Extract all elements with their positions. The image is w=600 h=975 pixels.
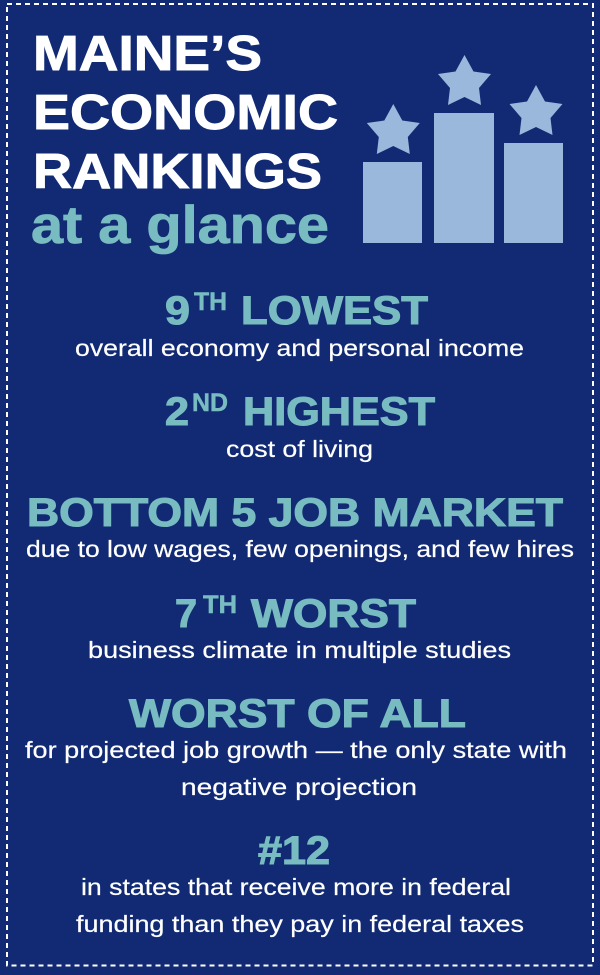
stat: 9th lowest: 9 (165, 289, 190, 333)
stat: bottom 5 job market: due to low wages, few openings, and few hires (26, 536, 574, 562)
stat: 9th lowest: LOWEST (241, 289, 428, 333)
stat: 2nd highest (165, 389, 435, 462)
stat: 7th worst (88, 591, 511, 663)
stat: worst of all (25, 692, 567, 800)
stat: worst of all: negative projection (181, 774, 417, 800)
title: ECONOMIC (33, 86, 338, 140)
stat: number 12 (76, 829, 524, 937)
stat: 2nd highest: cost of living (226, 436, 373, 462)
stat: 2nd highest: 2 (165, 390, 189, 434)
title: at a glance (31, 196, 329, 255)
stat: 9th lowest: overall economy and personal income (75, 335, 524, 361)
stat: 7th worst: business climate in multiple studies (88, 637, 511, 663)
stat: number 12: #12 (258, 829, 330, 873)
title: RANKINGS (33, 145, 322, 199)
stat: worst of all: WORST OF ALL (129, 692, 466, 736)
stat: 2nd highest: HIGHEST (243, 390, 435, 434)
icon: bar chart with stars (363, 55, 563, 243)
stat: 7th worst: TH (203, 591, 237, 619)
stat: bottom 5 job market: BOTTOM 5 JOB MARKET (27, 491, 563, 535)
title (31, 27, 338, 255)
stat: bottom 5 job market (26, 491, 574, 562)
stat: 7th worst: WORST (251, 592, 416, 636)
stat: 7th worst: 7 (175, 592, 197, 636)
title: MAINE’S (33, 27, 262, 81)
stat: worst of all: for projected job growth — the only state with (25, 737, 567, 763)
stat: 9th lowest (75, 288, 524, 361)
stat: 9th lowest: TH (194, 288, 227, 316)
stat: number 12: in states that receive more in federal (81, 874, 511, 900)
stat: number 12: funding than they pay in federal taxes (76, 911, 524, 937)
stat: 2nd highest: ND (192, 389, 228, 417)
